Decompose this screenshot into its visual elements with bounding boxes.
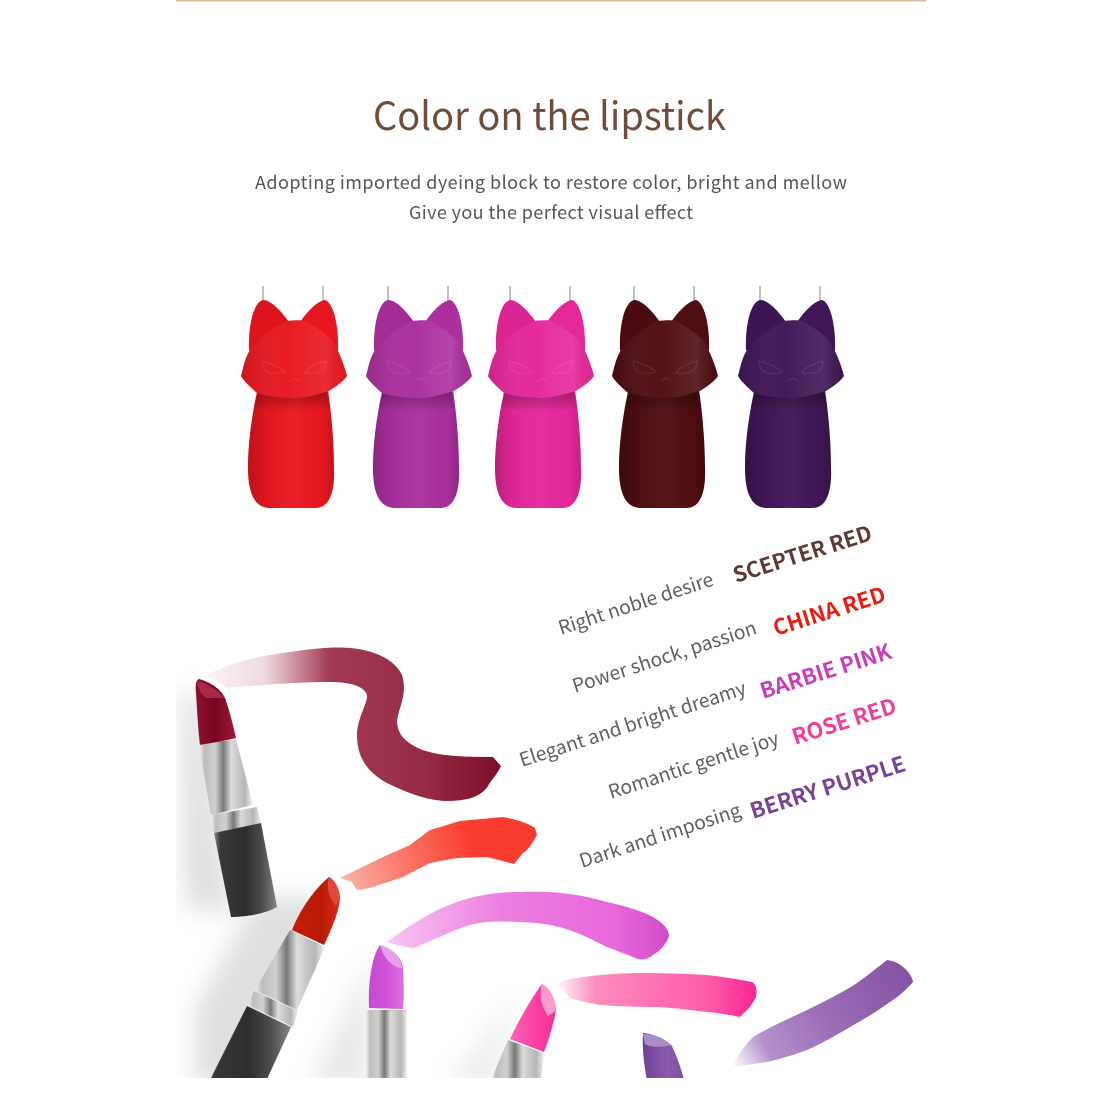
stroke: dark red bbox=[207, 647, 501, 801]
product row: five cat shaped lipsticks bbox=[241, 286, 844, 508]
row: scepter red bbox=[554, 517, 876, 641]
row: scepter red: Right noble desire bbox=[554, 564, 717, 641]
row: barbie pink: BARBIE PINK bbox=[756, 635, 895, 706]
cat: berry purple bbox=[738, 286, 844, 508]
subtitle bbox=[255, 169, 847, 225]
stroke: rose red bbox=[557, 973, 757, 1017]
row: rose red bbox=[604, 690, 900, 805]
lipstick: berry purple bbox=[643, 1033, 684, 1080]
row: china red: Power shock, passion bbox=[568, 613, 760, 699]
lipstick: barbie pink bbox=[366, 945, 407, 1080]
title: Color on the lipstick bbox=[373, 86, 726, 142]
subtitle line 2: Give you the perfect visual effect bbox=[409, 199, 693, 225]
stroke: berry purple bbox=[732, 960, 913, 1067]
row: berry purple bbox=[575, 748, 909, 874]
cat: rose pink bbox=[488, 286, 594, 508]
illustration: lipsticks and swatches bbox=[182, 647, 913, 1090]
row: barbie pink bbox=[515, 635, 895, 773]
row: rose red: Romantic gentle joy bbox=[604, 723, 782, 805]
row: berry purple: Dark and imposing bbox=[575, 795, 744, 874]
cat: barbie purple bbox=[366, 286, 472, 508]
row: berry purple: BERRY PURPLE bbox=[746, 748, 909, 826]
lipstick: dark red bbox=[196, 679, 277, 917]
lipstick: rose pink bbox=[491, 984, 556, 1080]
lipstick: china red bbox=[205, 877, 340, 1090]
stroke: barbie pink bbox=[387, 892, 669, 959]
stroke: china red bbox=[340, 817, 537, 890]
cat: scepter dark red bbox=[612, 286, 718, 508]
row: barbie pink: Elegant and bright dreamy bbox=[515, 673, 749, 773]
row: china red bbox=[568, 578, 889, 699]
row: scepter red: SCEPTER RED bbox=[729, 517, 876, 590]
colour names and descriptions bbox=[515, 517, 909, 874]
row: china red: CHINA RED bbox=[769, 578, 889, 643]
row: rose red: ROSE RED bbox=[788, 690, 900, 752]
subtitle line 1: Adopting imported dyeing block to restore color, bright and mellow bbox=[255, 169, 847, 195]
cast shadows bbox=[182, 690, 520, 1085]
top rule bbox=[176, 0, 926, 2]
cat: china red bbox=[241, 286, 347, 508]
